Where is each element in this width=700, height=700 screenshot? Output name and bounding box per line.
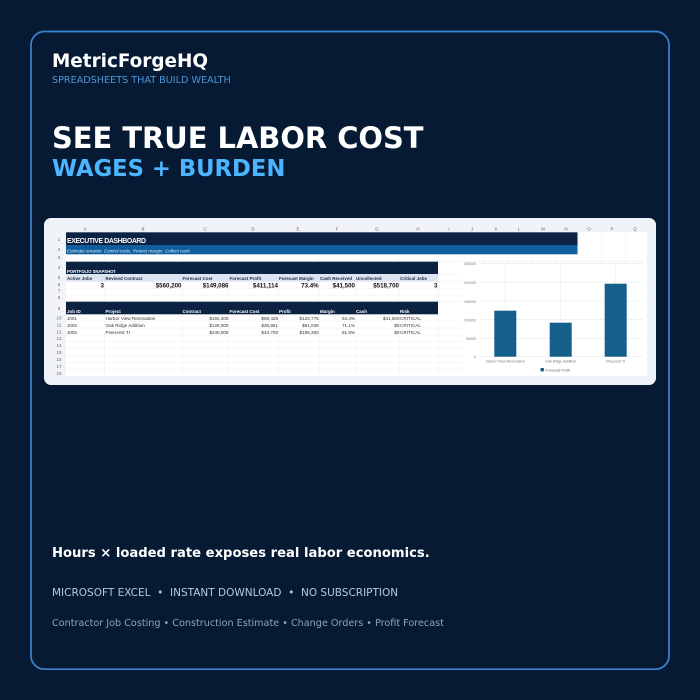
portfolio snapshot table: $560,200 — [156, 282, 182, 290]
bar chart: forecast profit: 250000 — [464, 262, 476, 266]
row numbers: 18 — [56, 371, 62, 376]
row numbers: 9 — [58, 306, 61, 311]
dashboard title bar — [66, 232, 578, 254]
row numbers: 1 — [58, 237, 61, 242]
job table: $0 — [394, 323, 400, 328]
job table: Harbor View Renovation — [106, 316, 156, 321]
portfolio snapshot table — [66, 262, 438, 290]
column headers: B — [141, 226, 145, 232]
portfolio snapshot table: Forecast Margin — [279, 276, 314, 281]
job table: Margin — [320, 309, 335, 314]
portfolio snapshot table: Revised Contract — [106, 276, 143, 281]
portfolio snapshot table: $41,500 — [333, 282, 356, 290]
job table — [66, 302, 438, 335]
row numbers: 15 — [56, 350, 62, 355]
column headers: F — [336, 226, 339, 232]
row numbers: 10 — [56, 316, 62, 320]
portfolio snapshot table: 73.4% — [301, 282, 319, 290]
job table: $91,039 — [302, 323, 319, 328]
job table: Risk — [400, 309, 410, 314]
column headers: J — [471, 226, 473, 232]
job table: Profit — [279, 309, 291, 314]
bar chart: forecast profit — [462, 262, 647, 376]
portfolio snapshot table: Uncollected — [356, 276, 382, 281]
bar chart: forecast profit: 100000 — [464, 318, 476, 322]
row numbers: 16 — [56, 357, 62, 362]
column headers: P — [610, 226, 614, 232]
row numbers: 14 — [56, 343, 62, 348]
column headers: G — [375, 226, 379, 232]
column headers: I — [448, 226, 450, 232]
keywords: Contractor Job Costing • Construction Estimate • Change Orders • Profit Forecast — [52, 618, 444, 628]
job table: J002 — [67, 323, 77, 328]
job table: $196,300 — [300, 330, 319, 335]
bar chart: forecast profit: 200000 — [464, 281, 476, 285]
job table: $41,500 — [383, 316, 400, 321]
job table: Pinecrest TI — [106, 330, 130, 335]
job table: 81.8% — [342, 330, 355, 335]
portfolio snapshot table: Forecast Profit — [230, 276, 262, 281]
portfolio snapshot table: PORTFOLIO SNAPSHOT — [67, 269, 116, 274]
job table: Oak Ridge Addition — [106, 323, 145, 328]
column headers: L — [518, 226, 521, 232]
bar chart: forecast profit: 150000 — [464, 300, 476, 304]
job table: Contract — [182, 309, 202, 314]
portfolio snapshot table: $518,700 — [373, 282, 400, 290]
row numbers: 8 — [58, 295, 61, 300]
tagline: SPREADSHEETS THAT BUILD WEALTH — [52, 74, 231, 86]
row numbers: 7 — [58, 288, 61, 294]
row numbers: 5 — [58, 275, 61, 280]
job table: $192,200 — [209, 316, 229, 321]
job table: CRITICAL — [400, 323, 421, 328]
job table: $0 — [394, 330, 400, 335]
bar chart: forecast profit: Harbor View Renovation — [486, 360, 525, 364]
column headers — [83, 226, 637, 232]
job table: $36,961 — [261, 323, 278, 328]
column headers: N — [564, 226, 568, 232]
job table: $128,000 — [209, 323, 229, 328]
job table: CRITICAL — [400, 330, 421, 335]
product attributes: MICROSOFT EXCEL • INSTANT DOWNLOAD • NO SUBSCRIPTION — [52, 587, 398, 599]
job table: CRITICAL — [400, 316, 421, 321]
bar chart: forecast profit: Forecast Profit — [546, 368, 571, 372]
bar chart: forecast profit: Oak Ridge Addition — [545, 360, 576, 364]
bar chart: forecast profit: Pinecrest TI — [606, 360, 625, 364]
bar chart: forecast profit: 0 — [474, 355, 476, 359]
row numbers: 11 — [57, 322, 62, 328]
row numbers — [56, 237, 62, 376]
job table: $68,425 — [261, 316, 278, 321]
brand name: MetricForgeHQ — [52, 51, 208, 72]
job table: Job ID — [67, 309, 82, 314]
job table: $240,000 — [209, 330, 229, 335]
job table: Forecast Cost — [230, 309, 260, 314]
dashboard title bar: EXECUTIVE DASHBOARD — [67, 238, 146, 245]
value statement: Hours × loaded rate exposes real labor economics. — [52, 546, 430, 560]
portfolio snapshot table: Critical Jobs — [400, 276, 428, 281]
bar chart: forecast profit: 50000 — [466, 337, 476, 341]
row numbers: 13 — [56, 336, 62, 341]
sub heading: WAGES + BURDEN — [52, 156, 285, 182]
column headers: K — [494, 226, 498, 232]
job table: $43,700 — [261, 330, 278, 335]
portfolio snapshot table: 3 — [101, 282, 105, 290]
row numbers: 17 — [56, 364, 62, 369]
portfolio snapshot table: Active Jobs — [67, 276, 93, 281]
portfolio snapshot table: 3 — [434, 282, 438, 290]
job table: Cash — [356, 309, 367, 314]
job table: 64.4% — [342, 316, 355, 321]
column headers: M — [541, 226, 545, 232]
column headers: A — [83, 226, 87, 232]
portfolio snapshot table: Forecast Cost — [182, 276, 213, 281]
column headers: H — [416, 226, 420, 232]
row numbers: 3 — [58, 255, 61, 260]
column headers: E — [296, 226, 300, 232]
job table: J001 — [67, 316, 77, 321]
column headers: O — [587, 226, 591, 232]
dashboard title bar: Estimate smarter. Control costs. Protect margin. Collect cash. — [67, 248, 191, 254]
job table: 71.1% — [342, 323, 355, 328]
job table: J003 — [67, 330, 77, 335]
column headers: D — [251, 226, 255, 232]
row numbers: 2 — [58, 247, 61, 252]
portfolio snapshot table: Cash Received — [320, 276, 352, 281]
column headers: C — [203, 226, 207, 232]
job table: Project — [106, 309, 121, 314]
portfolio snapshot table: $411,114 — [253, 282, 279, 290]
row numbers: 6 — [58, 282, 61, 287]
row numbers: 12 — [56, 330, 62, 334]
column headers: Q — [633, 226, 637, 232]
portfolio snapshot table: $149,086 — [203, 282, 229, 290]
row numbers: 4 — [58, 265, 61, 270]
main heading: SEE TRUE LABOR COST — [52, 121, 423, 155]
job table: $123,775 — [300, 316, 319, 321]
